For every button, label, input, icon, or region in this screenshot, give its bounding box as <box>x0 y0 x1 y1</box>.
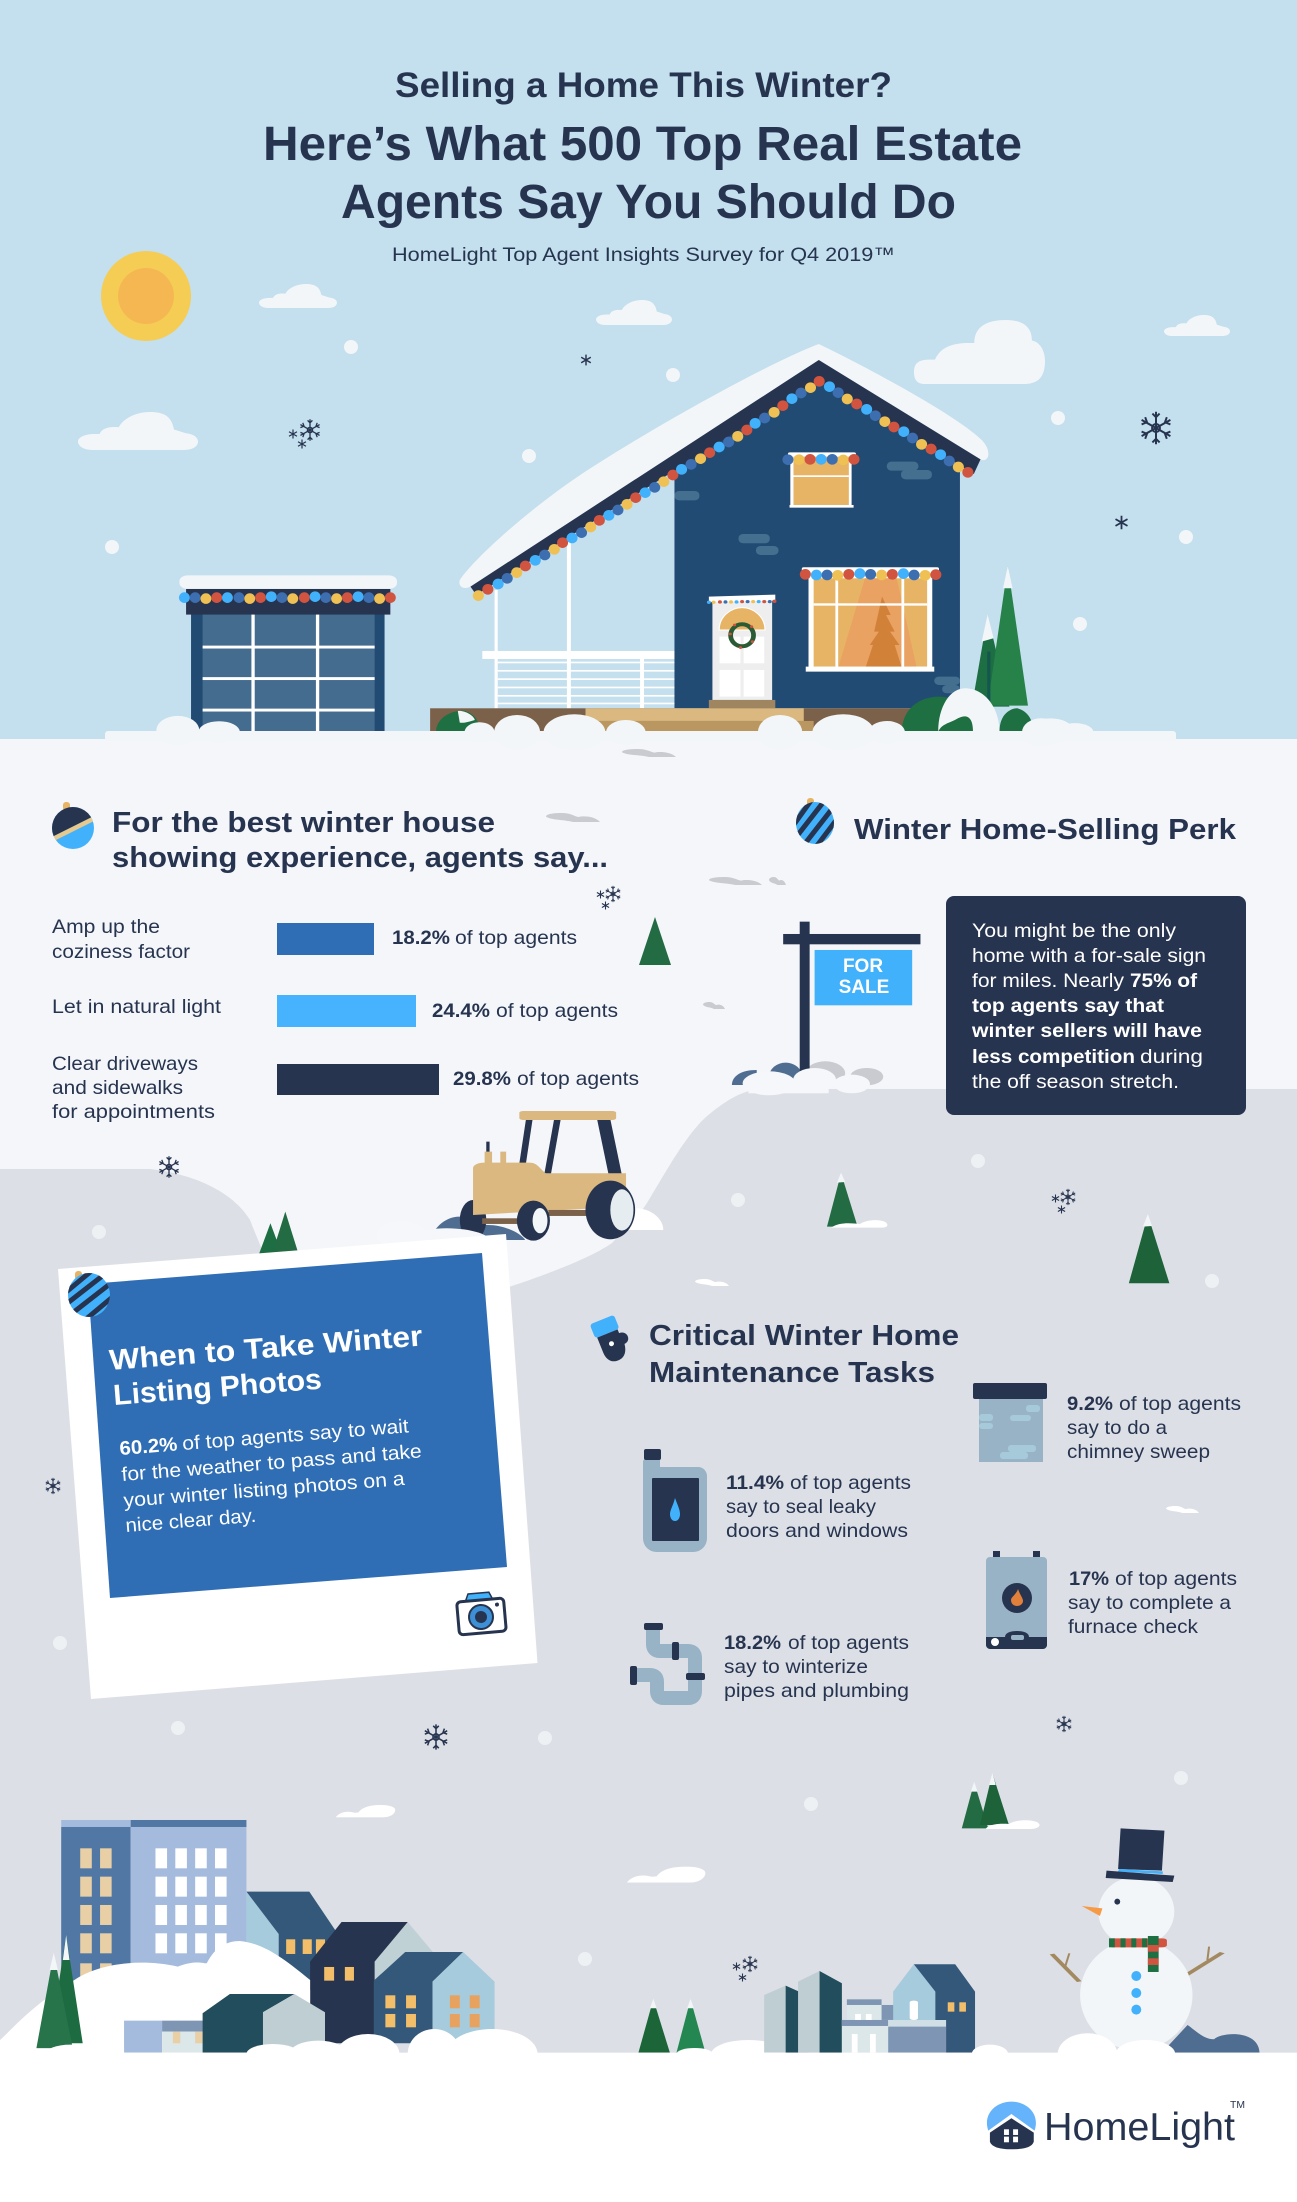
small pale building <box>124 2021 216 2053</box>
item: seal leaky doors and windows <box>643 1449 911 1552</box>
bar row: natural light: of top agents <box>496 1000 618 1022</box>
garage string lights <box>179 591 396 604</box>
title: kicker: Selling a Home This Winter? <box>395 66 892 105</box>
icon: striped ornament <box>68 1271 110 1317</box>
snowflake cluster and tree near bars <box>159 886 671 1178</box>
item: winterize pipes: 18.2% <box>724 1632 781 1654</box>
icon: chimney <box>973 1383 1047 1462</box>
bushes with snow <box>436 688 1033 732</box>
icon: pipes <box>630 1623 705 1698</box>
blue bush behind snowman <box>1162 2025 1260 2053</box>
polaroid body text: for the weather to pass and take <box>121 1440 422 1486</box>
callout box: winter sellers will have <box>971 1020 1202 1042</box>
item: chimney sweep <box>973 1383 1241 1463</box>
title: main line 2: Agents Say You Should Do <box>341 176 956 229</box>
scarf <box>1109 1936 1167 1972</box>
footer ground fill <box>0 2053 1297 2055</box>
bar row: natural light: 24.4% <box>432 1000 490 1022</box>
white footer background <box>0 2053 1297 2202</box>
item: furnace check: furnace check <box>1068 1616 1198 1638</box>
snow dots and flakes on hills <box>46 1154 1219 1966</box>
sky background <box>0 0 1297 739</box>
snowman <box>1052 1828 1260 2075</box>
tall apartment building <box>61 1820 246 1994</box>
heading: Maintenance Tasks <box>649 1357 935 1389</box>
logo wordmark: TM <box>1230 2100 1245 2111</box>
callout box: the off season stretch. <box>972 1071 1179 1093</box>
item: furnace check: of top agents <box>1115 1568 1237 1590</box>
icon: camera <box>456 1591 506 1635</box>
item: winterize pipes: of top agents <box>788 1632 909 1654</box>
distant trees with snow <box>962 1773 1040 1829</box>
porch railing and posts <box>482 540 674 708</box>
callout box: less competition <box>972 1046 1135 1068</box>
pale snowfield section <box>0 739 1297 1299</box>
bar row: clear driveways: Clear driveways <box>52 1053 198 1075</box>
buttons <box>1131 1971 1141 2015</box>
item: seal leaky doors and windows: 11.4% <box>726 1472 784 1494</box>
roof string lights <box>473 376 973 601</box>
callout box: 75% of <box>1130 970 1198 992</box>
blue house behind <box>246 1892 337 1990</box>
polaroid heading: When to Take Winter <box>108 1320 424 1377</box>
item: chimney sweep: say to do a <box>1067 1417 1167 1439</box>
clouds in the sky <box>78 284 1230 450</box>
polaroid heading <box>108 1320 424 1412</box>
item: furnace check: say to complete a <box>1068 1592 1231 1614</box>
snowflake cluster mid bottom <box>733 1956 757 1982</box>
snowman arms <box>1052 1947 1222 1987</box>
bar row: coziness: coziness factor <box>52 941 191 963</box>
icon: sun <box>101 251 191 341</box>
icon: furnace <box>986 1551 1047 1649</box>
icon: mitten <box>590 1313 635 1365</box>
face <box>1114 1899 1120 1905</box>
deck <box>430 708 928 732</box>
polaroid body text: nice clear day. <box>125 1505 257 1537</box>
middle trees <box>638 1999 786 2068</box>
bottom cityscape <box>0 1773 1297 2149</box>
snow mounds left <box>0 2029 538 2079</box>
rear inner wheel <box>460 1200 486 1240</box>
callout box <box>946 896 1246 1115</box>
callout box: home with a for-sale sign <box>972 945 1206 967</box>
bushes at sign base <box>732 1061 883 1091</box>
callout box: top agents say that <box>972 995 1165 1017</box>
bar row: coziness: of top agents <box>455 927 577 949</box>
garage wall <box>191 611 385 732</box>
bar row: clear driveways <box>52 1053 639 1123</box>
small clouds over city <box>336 1805 705 1883</box>
item: seal leaky doors and windows: doors and windows <box>726 1520 908 1542</box>
bar row: natural light <box>52 995 618 1027</box>
heading: Critical Winter Home <box>649 1320 959 1352</box>
item: furnace check <box>986 1551 1237 1649</box>
heading: showing experience, agents say... <box>112 842 608 874</box>
large snow drift <box>0 1941 310 2053</box>
logo wordmark: HomeLight <box>1044 2106 1235 2149</box>
icon: sealant bottle <box>643 1449 707 1552</box>
polaroid: when to take winter listing photos <box>58 1234 538 1699</box>
house body <box>674 377 960 708</box>
large window with tree <box>800 567 941 672</box>
item: chimney sweep: chimney sweep <box>1067 1441 1210 1463</box>
section: winter home-selling perk <box>732 795 1246 1115</box>
polaroid body text: 60.2% <box>119 1434 178 1460</box>
bar row: clear driveways: for appointments <box>52 1101 215 1123</box>
polaroid heading: Listing Photos <box>112 1364 323 1412</box>
item: seal leaky doors and windows: of top agents <box>790 1472 911 1494</box>
rear wheel <box>586 1181 635 1239</box>
snowflakes in the sky <box>289 355 1170 529</box>
hat <box>1118 1828 1164 1871</box>
grey hills background <box>0 1089 1297 2053</box>
snow plow tractor <box>376 1111 663 1258</box>
bar row: clear driveways: and sidewalks <box>52 1077 183 1099</box>
falling snow dots in the sky <box>105 340 1193 631</box>
teal house <box>203 1994 325 2053</box>
garage door <box>203 615 375 732</box>
grey drifting clouds <box>546 749 786 1009</box>
bar row: coziness: 18.2% <box>392 927 450 949</box>
upper window <box>782 452 860 508</box>
item: furnace check: 17% <box>1069 1568 1109 1590</box>
logo icon <box>987 2102 1036 2149</box>
for-sale sign <box>732 922 920 1095</box>
trees and snow on grey hills <box>258 1173 1169 1283</box>
snow at base <box>1058 2033 1175 2075</box>
ground snow band <box>105 716 1176 745</box>
middle building cluster <box>764 1964 1008 2063</box>
section: critical winter home maintenance tasks <box>590 1313 1241 1702</box>
polaroid body text: of top agents say to wait <box>181 1415 410 1455</box>
callout box: You might be the only <box>972 920 1176 942</box>
title: main line 1: Here’s What 500 Top Real Estate <box>263 118 1022 171</box>
roll bars <box>486 1119 622 1175</box>
for-sale sign: FOR <box>843 956 883 977</box>
bar row: clear driveways: 29.8% <box>453 1068 511 1090</box>
two-tone house <box>374 1952 495 2043</box>
title: survey subtitle: HomeLight Top Agent Insights Survey for Q4 2019™ <box>392 244 895 266</box>
front door with wreath <box>707 595 776 709</box>
heading <box>112 807 608 874</box>
tractor body <box>473 1152 626 1215</box>
callout box: during <box>1140 1046 1203 1068</box>
icon: striped ornament <box>796 798 834 844</box>
tractor back snow and bush <box>430 1208 663 1240</box>
bar row: coziness: Amp up the <box>52 916 160 938</box>
garage <box>179 575 397 732</box>
snow at sign base <box>743 1068 870 1095</box>
heading <box>649 1320 959 1389</box>
heading: For the best winter house <box>112 807 495 839</box>
for-sale sign: SALE <box>839 977 889 998</box>
item: winterize pipes <box>630 1623 909 1702</box>
polaroid body text <box>119 1415 422 1537</box>
roof snow <box>459 344 988 588</box>
evergreen trees beside house <box>972 566 1028 708</box>
item: winterize pipes: pipes and plumbing <box>724 1680 909 1702</box>
title block <box>263 66 1022 266</box>
bar row: natural light: Let in natural light <box>52 996 222 1018</box>
bar row: clear driveways: of top agents <box>517 1068 639 1090</box>
icon: half-blue ornament <box>52 802 94 849</box>
photo panel <box>88 1253 507 1598</box>
polaroid body text: your winter listing photos on a <box>123 1468 406 1512</box>
section: best winter house showing <box>50 802 639 1123</box>
item: seal leaky doors and windows: say to seal leaky <box>726 1496 876 1518</box>
callout box: for miles. Nearly <box>972 970 1124 992</box>
item: chimney sweep: 9.2% <box>1067 1393 1113 1415</box>
heading: Winter Home-Selling Perk <box>854 814 1237 846</box>
plow snow <box>376 1221 492 1258</box>
left trees <box>36 1935 83 2048</box>
house illustration <box>430 344 1060 750</box>
snowman body <box>1080 1940 1193 2050</box>
roof fascia <box>470 360 981 595</box>
photo frame <box>58 1234 538 1699</box>
axles <box>482 1210 588 1224</box>
item: chimney sweep: of top agents <box>1119 1393 1241 1415</box>
roof <box>519 1111 616 1120</box>
wall bricks <box>674 462 960 693</box>
front wheel <box>517 1201 550 1241</box>
bar row: coziness <box>52 916 577 963</box>
item: winterize pipes: say to winterize <box>724 1656 868 1678</box>
garage roof snow <box>179 575 397 589</box>
snow mounds on deck <box>465 714 1060 750</box>
garage roof band <box>186 589 390 615</box>
navy house <box>310 1922 433 2043</box>
